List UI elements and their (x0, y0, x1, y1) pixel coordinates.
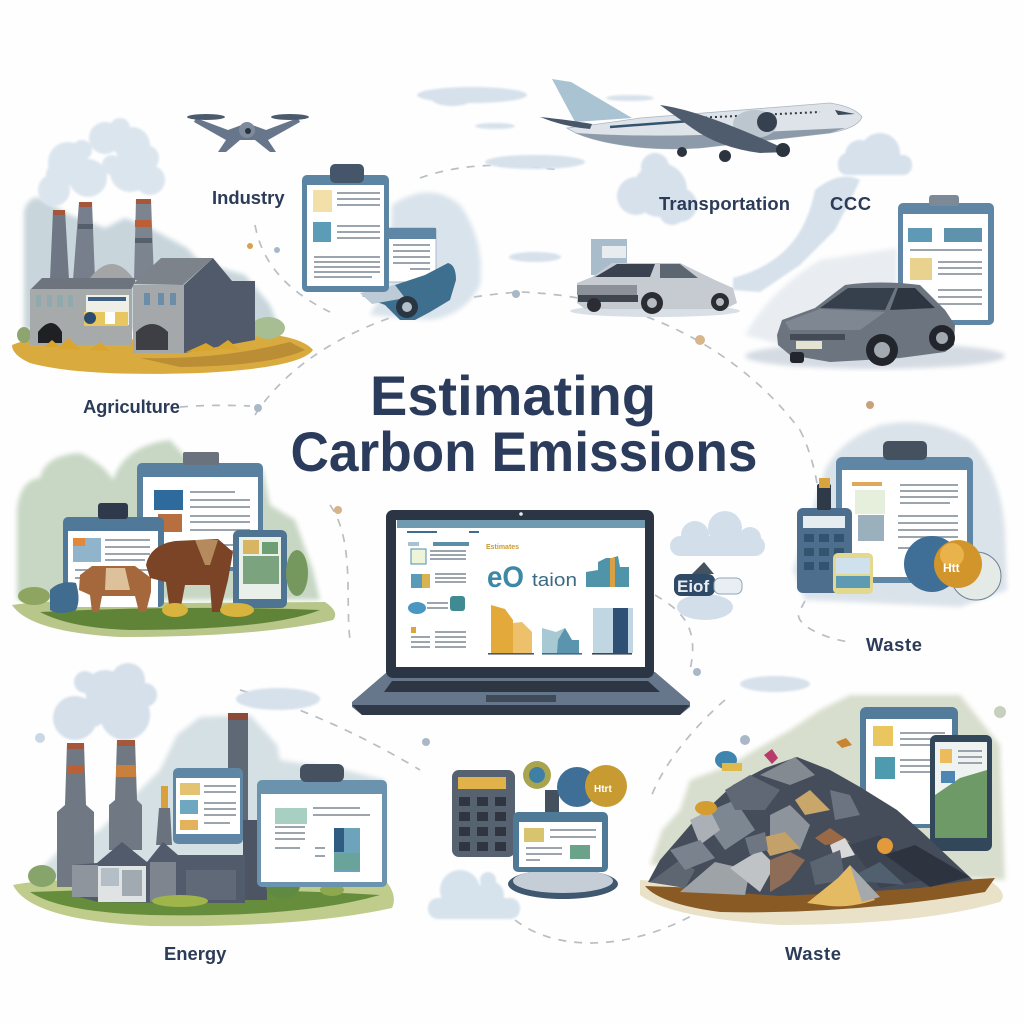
cloud with data chip (670, 511, 765, 620)
lid (386, 510, 654, 678)
cow large (146, 539, 233, 612)
paint splatter details (35, 243, 1006, 746)
drone (187, 114, 309, 152)
main clipboard (302, 175, 389, 292)
spheres (523, 761, 551, 789)
title (290, 364, 758, 483)
dome (90, 264, 133, 278)
title: Carbon Emissions (290, 420, 758, 483)
panel: industry clipboard and car (302, 164, 481, 320)
scene: calculator and devices (428, 761, 627, 919)
calculator (452, 770, 515, 857)
panel: tablet (860, 707, 958, 828)
mini bar chart (586, 556, 629, 587)
panel: phone (233, 530, 287, 608)
wash background behind factory (24, 198, 280, 330)
hay (162, 603, 254, 617)
panel: large screen (137, 463, 263, 571)
rock pieces (650, 860, 695, 888)
smoke (53, 663, 157, 740)
label: CCC: CCC (830, 193, 871, 214)
smoke clouds (38, 118, 165, 206)
panel: left screen (63, 517, 164, 607)
cow small (79, 566, 151, 612)
scene: waste station right (793, 422, 1007, 607)
bushes (266, 874, 300, 898)
right block (133, 258, 213, 285)
dark panel chart (593, 608, 633, 653)
pale wash behind gray car (745, 248, 897, 350)
scene: industry factory (12, 118, 313, 374)
blue wash (793, 422, 1007, 607)
orange area chart (491, 605, 513, 653)
title: Estimating (370, 364, 656, 427)
wash clouds in the sky (236, 87, 810, 710)
scene: agriculture (12, 440, 335, 637)
bush (286, 550, 308, 596)
chimneys (50, 210, 69, 280)
cloud with data chip: Eiof (677, 577, 709, 596)
logo text eO: eO (487, 561, 524, 594)
grass (251, 317, 285, 339)
bottle icon (817, 484, 831, 510)
label: Waste right: Waste (866, 634, 922, 655)
clipboard (898, 203, 994, 325)
label: Transportation: Transportation (659, 193, 790, 214)
trash tokens (715, 751, 737, 769)
panel: big clipboard (836, 457, 973, 583)
car (777, 282, 955, 362)
spheres (951, 552, 1001, 600)
wash (30, 715, 385, 880)
ground (13, 880, 394, 926)
small car (362, 263, 456, 320)
laptop (352, 510, 690, 715)
blue area chart (542, 628, 579, 653)
second document (386, 228, 436, 282)
scene: waste pile (640, 695, 1005, 925)
icon: airplane (540, 79, 862, 162)
cloud (428, 870, 520, 919)
ball (50, 582, 78, 613)
logo text taion: taion (532, 570, 577, 590)
scene: calculator and devices: Htrt (594, 784, 612, 795)
panel: clipboard (257, 780, 387, 887)
green wash (650, 695, 1005, 880)
left hall (30, 278, 135, 290)
piles (44, 338, 240, 352)
screen left column (408, 542, 419, 546)
phone (930, 735, 992, 851)
scene: white car with document (570, 239, 740, 317)
panel: tablet (173, 768, 243, 844)
ground (12, 333, 313, 374)
rock pile (648, 757, 973, 896)
label: Energy: Energy (164, 943, 227, 964)
ground (12, 601, 335, 637)
small heading: Estimates (486, 544, 519, 551)
label: Waste bottom: Waste (785, 943, 841, 964)
scene: energy (13, 663, 394, 926)
yellow bag (807, 865, 875, 906)
scene: gray car with clipboard (745, 195, 1005, 369)
label: Agriculture: Agriculture (83, 396, 180, 417)
scene: waste station right: Htt (943, 561, 960, 575)
dashed connector ring (180, 165, 850, 943)
card (833, 553, 873, 594)
calculator (797, 508, 852, 593)
keyboard base (352, 672, 690, 715)
houses (243, 820, 267, 900)
wash behind car (370, 192, 481, 320)
shadow (745, 343, 1005, 369)
tablet on stand (508, 869, 618, 899)
green wash (17, 440, 320, 600)
ground (640, 878, 1003, 925)
label: Industry: Industry (212, 187, 285, 208)
tall chimneys (57, 743, 94, 887)
clouds around transportation (617, 133, 912, 292)
